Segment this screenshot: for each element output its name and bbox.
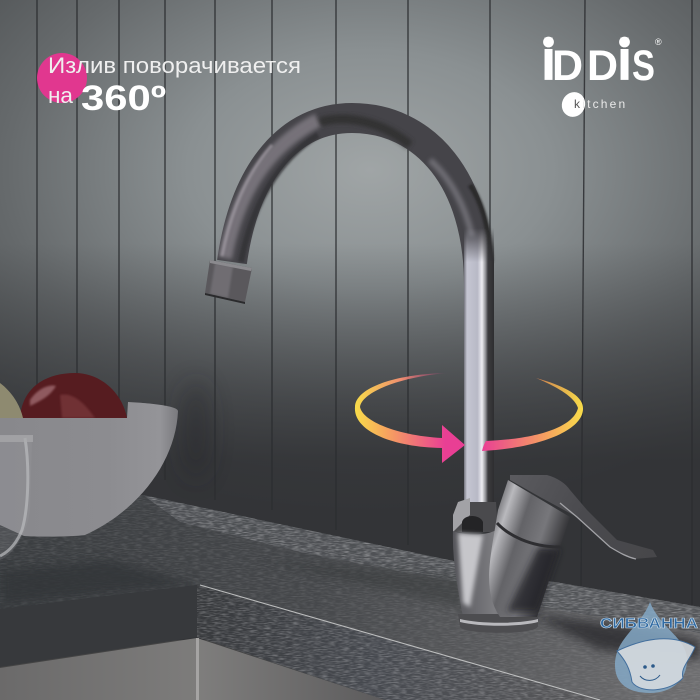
drop — [615, 602, 687, 693]
counter highlight line — [200, 585, 600, 700]
iddis kitchen logo: ® — [655, 37, 662, 47]
watermark wordmark: СИБВАННА — [600, 615, 698, 632]
wordmark: S — [632, 42, 655, 90]
pink circle accent — [37, 53, 87, 103]
face — [643, 664, 655, 669]
spout arc — [222, 118, 491, 285]
countertop — [0, 490, 700, 700]
counter front edge, left — [0, 585, 197, 667]
kitchen mark: kitchen — [574, 97, 627, 111]
wordmark: i — [540, 28, 557, 93]
apple — [20, 373, 127, 418]
faucet body — [453, 528, 537, 617]
heading: spout rotates 360: Излив поворачивается — [48, 53, 301, 78]
heading: spout rotates 360 — [48, 53, 301, 118]
faucet — [205, 118, 657, 633]
bathtub — [617, 639, 695, 690]
wordmark: D — [552, 42, 583, 90]
rotation arrow behind pole: top arcs — [355, 373, 583, 408]
wordmark: D — [587, 42, 618, 90]
right arc — [482, 408, 583, 451]
cylinder lower shadow — [507, 547, 560, 612]
spout nozzle — [205, 260, 252, 304]
iddis kitchen logo — [540, 28, 662, 121]
pole collar — [453, 498, 498, 532]
wordmark — [540, 28, 655, 93]
textured back strip of counter — [140, 490, 700, 640]
vertical pole — [464, 228, 494, 505]
sink — [0, 638, 385, 700]
mixer cylinder — [489, 480, 570, 617]
glass — [0, 435, 33, 560]
heading: spout rotates 360: на — [48, 83, 73, 108]
lever handle — [510, 475, 657, 559]
mixer ring — [497, 523, 560, 547]
bowl — [0, 402, 178, 537]
left arc with arrowhead — [355, 407, 465, 463]
counter front edge, right — [197, 585, 600, 700]
rotation arrow front — [355, 407, 583, 463]
heading: spout rotates 360: 360º — [81, 79, 166, 118]
wordmark: i — [616, 28, 633, 93]
apple slice — [0, 383, 23, 418]
sibvanna watermark — [600, 602, 698, 693]
bowl with apples — [0, 373, 178, 537]
base ring — [458, 614, 538, 633]
